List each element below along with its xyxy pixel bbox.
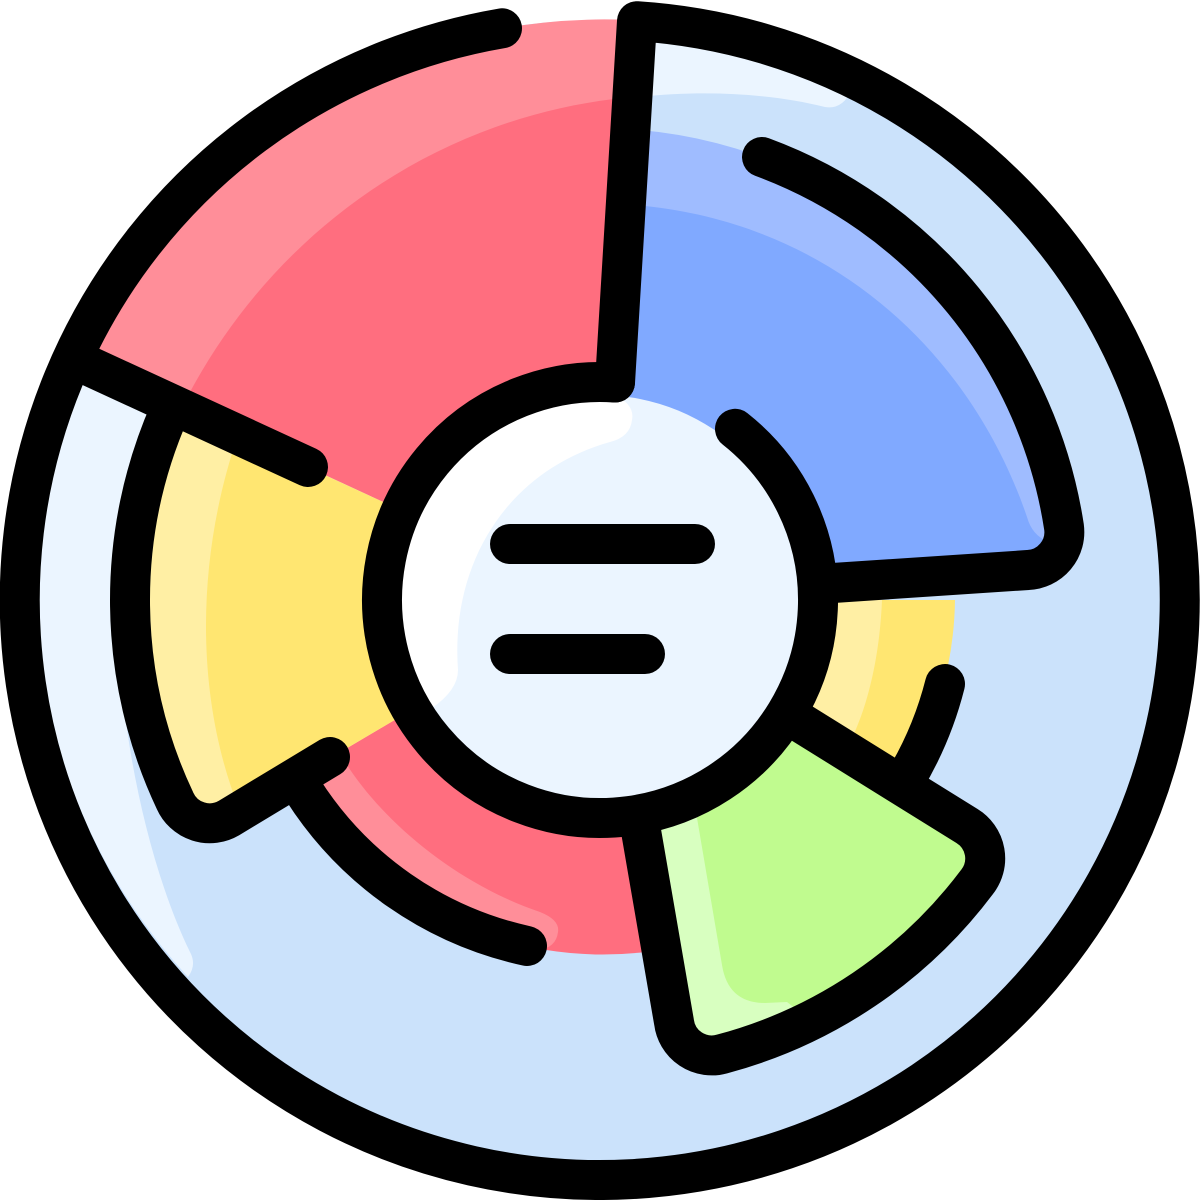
blue segment outline [762,157,1064,584]
segment: right yellow [795,600,955,785]
green fill [640,716,985,1055]
blue inner fill [620,206,1047,584]
segment: bottom red [300,690,645,955]
divider: top left [76,360,308,467]
right yellow highlight [795,600,882,738]
highlight: lower left [35,365,193,977]
red outer band [76,19,630,519]
right yellow arc [905,684,945,780]
left yellow highlight [129,404,420,823]
center fill [395,395,805,805]
segment: left yellow [129,404,420,823]
green segment outline [640,716,985,1055]
inner ring outline [382,382,818,818]
bottom red arc [303,790,527,946]
green highlight [640,812,810,1055]
center disc [395,395,805,805]
blue outer band [620,130,1064,584]
bottom red fill [300,690,645,955]
equals line: bottom [510,634,645,674]
center highlight [401,395,632,708]
highlight: top right [640,30,852,107]
bottom red highlight [303,762,558,950]
segment: blue [620,130,1064,584]
left yellow outline [130,410,330,823]
equals line: top [510,524,695,564]
segment: green [640,716,985,1055]
left yellow fill [206,435,420,811]
segment: top red [76,19,630,519]
red inner fill [190,99,614,519]
right yellow fill [795,600,955,785]
